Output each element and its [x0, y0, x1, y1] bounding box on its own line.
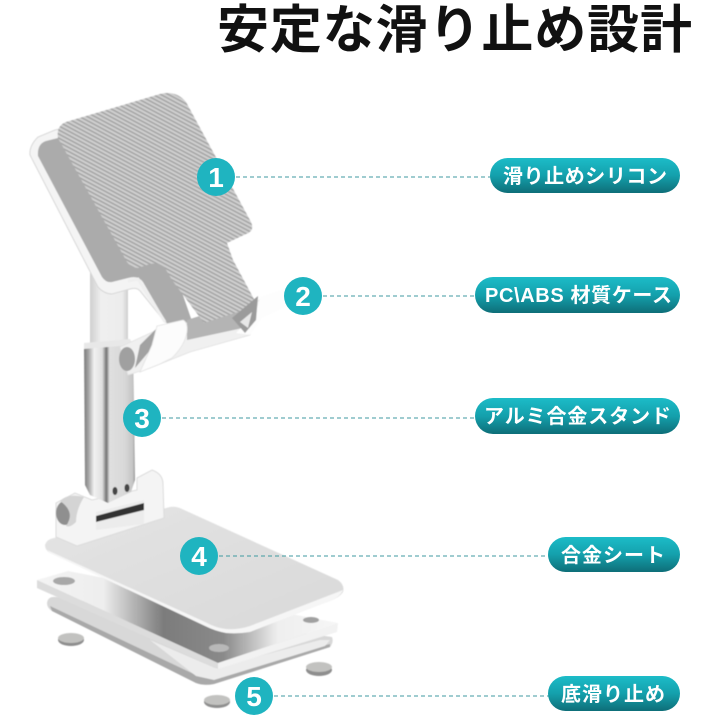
product illustration: phone stand [30, 93, 343, 708]
label 3: アルミ合金スタンド [484, 405, 671, 428]
callout 2: line and marker [284, 277, 476, 315]
label 3 [475, 398, 680, 434]
middle metal plate [37, 571, 338, 669]
callout 2: line and marker: 2 [295, 281, 311, 312]
bottom base plate [47, 597, 333, 685]
label 2 [475, 277, 680, 313]
aluminium post [84, 339, 135, 503]
callout 4: line and marker: 4 [191, 541, 207, 572]
callout 1: line and marker [197, 158, 492, 196]
label 5: 底滑り止め [561, 683, 665, 706]
rubber foot right [306, 662, 332, 676]
callout 5: line and marker [235, 677, 550, 715]
label 1: 滑り止めシリコン [503, 165, 667, 188]
upper white post [90, 270, 128, 346]
title: 安定な滑り止め設計 [217, 2, 692, 60]
label 4: 合金シート [561, 544, 665, 567]
top base plate [45, 507, 343, 633]
cradle arm and pivot [119, 288, 290, 375]
callout 5: line and marker: 5 [246, 681, 262, 712]
label 1 [490, 158, 680, 193]
rubber foot left [58, 633, 84, 646]
right cradle clip [232, 296, 258, 333]
label 5 [548, 676, 680, 711]
callout 3: line and marker [123, 399, 476, 437]
label 4 [548, 537, 680, 572]
callout 1: line and marker: 1 [208, 162, 224, 193]
callout 4: line and marker [180, 537, 550, 575]
hinge block [56, 470, 164, 546]
label 2: PC\ABS 材質ケース [485, 284, 672, 307]
non-slip silicone pad [58, 93, 255, 323]
phone holder back shell [30, 120, 195, 330]
callout 3: line and marker: 3 [134, 403, 150, 434]
rubber foot center [204, 695, 230, 708]
